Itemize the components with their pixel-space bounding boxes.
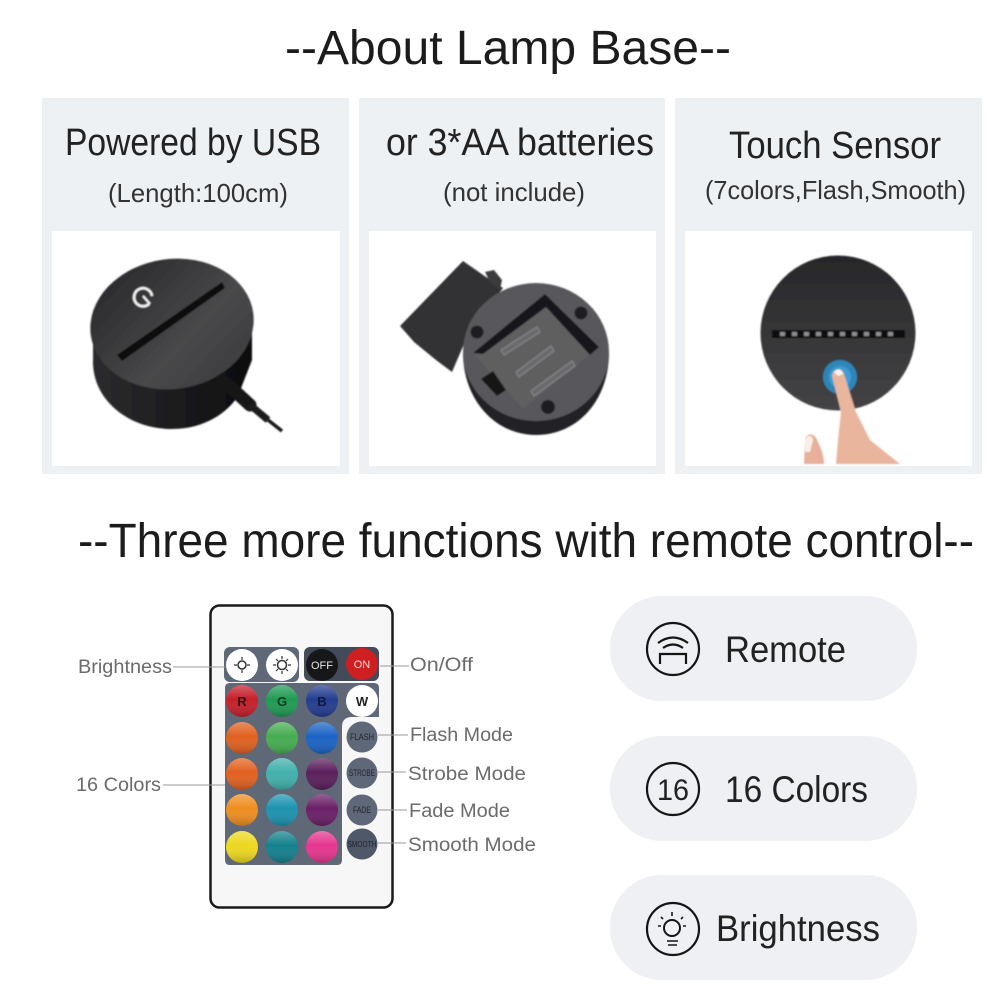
text: not included: (not include) bbox=[443, 177, 585, 207]
title: about lamp base: --About Lamp Base-- bbox=[285, 22, 731, 75]
pill: 16 colors: 16 Colors bbox=[725, 769, 868, 810]
mode buttons bbox=[346, 722, 378, 860]
callout: smooth mode: Smooth Mode bbox=[408, 835, 536, 856]
icon: number 16: 16 bbox=[657, 774, 689, 807]
panel: powered by USB bbox=[42, 98, 349, 474]
heading: batteries: or 3*AA batteries bbox=[386, 122, 654, 164]
photo: lamp base with USB cable bbox=[82, 248, 282, 431]
callout: brightness: Brightness bbox=[78, 657, 172, 678]
callout: on/off bbox=[380, 655, 474, 676]
mode buttons: STROBE bbox=[349, 768, 375, 778]
on/off button group bbox=[304, 647, 379, 681]
heading: touch sensor: Touch Sensor bbox=[729, 125, 941, 167]
color button panel: R bbox=[237, 694, 247, 709]
photo: finger touching sensor bbox=[760, 256, 916, 464]
callout: on/off: On/Off bbox=[410, 655, 474, 676]
text: touch modes: (7colors,Flash,Smooth) bbox=[705, 175, 966, 205]
remote control bbox=[210, 606, 392, 908]
panel: touch sensor bbox=[675, 98, 982, 474]
brightness button group bbox=[224, 647, 299, 682]
mode buttons: FADE bbox=[353, 805, 371, 815]
on/off button group: OFF bbox=[311, 660, 333, 672]
callout: 16 colors: 16 Colors bbox=[76, 775, 161, 796]
callout: fade mode: Fade Mode bbox=[409, 801, 510, 822]
pill: remote: Remote bbox=[725, 629, 846, 670]
callout: flash mode: Flash Mode bbox=[410, 725, 513, 746]
on/off button group: ON bbox=[354, 659, 370, 671]
pill: remote bbox=[610, 596, 917, 701]
pill: brightness: Brightness bbox=[716, 908, 880, 949]
icon: remote signal bbox=[647, 623, 699, 675]
color button panel: W bbox=[356, 694, 369, 709]
color button panel bbox=[225, 683, 379, 865]
heading: powered by USB: Powered by USB bbox=[65, 122, 321, 164]
icon: light bulb bbox=[647, 903, 699, 955]
pill: 16 colors bbox=[610, 736, 917, 841]
callout: strobe mode: Strobe Mode bbox=[408, 764, 526, 785]
photo: battery compartment bbox=[400, 261, 609, 435]
panel: AA batteries bbox=[359, 98, 665, 474]
text: cable length: (Length:100cm) bbox=[108, 178, 288, 208]
icon: number 16 bbox=[647, 763, 699, 815]
mode buttons: SMOOTH bbox=[348, 840, 377, 849]
color button panel: G bbox=[277, 694, 287, 709]
mode buttons: FLASH bbox=[350, 732, 374, 742]
title: three more functions: --Three more functions with remote control-- bbox=[78, 515, 974, 568]
pill: brightness bbox=[610, 875, 917, 980]
color button panel: B bbox=[317, 694, 327, 709]
